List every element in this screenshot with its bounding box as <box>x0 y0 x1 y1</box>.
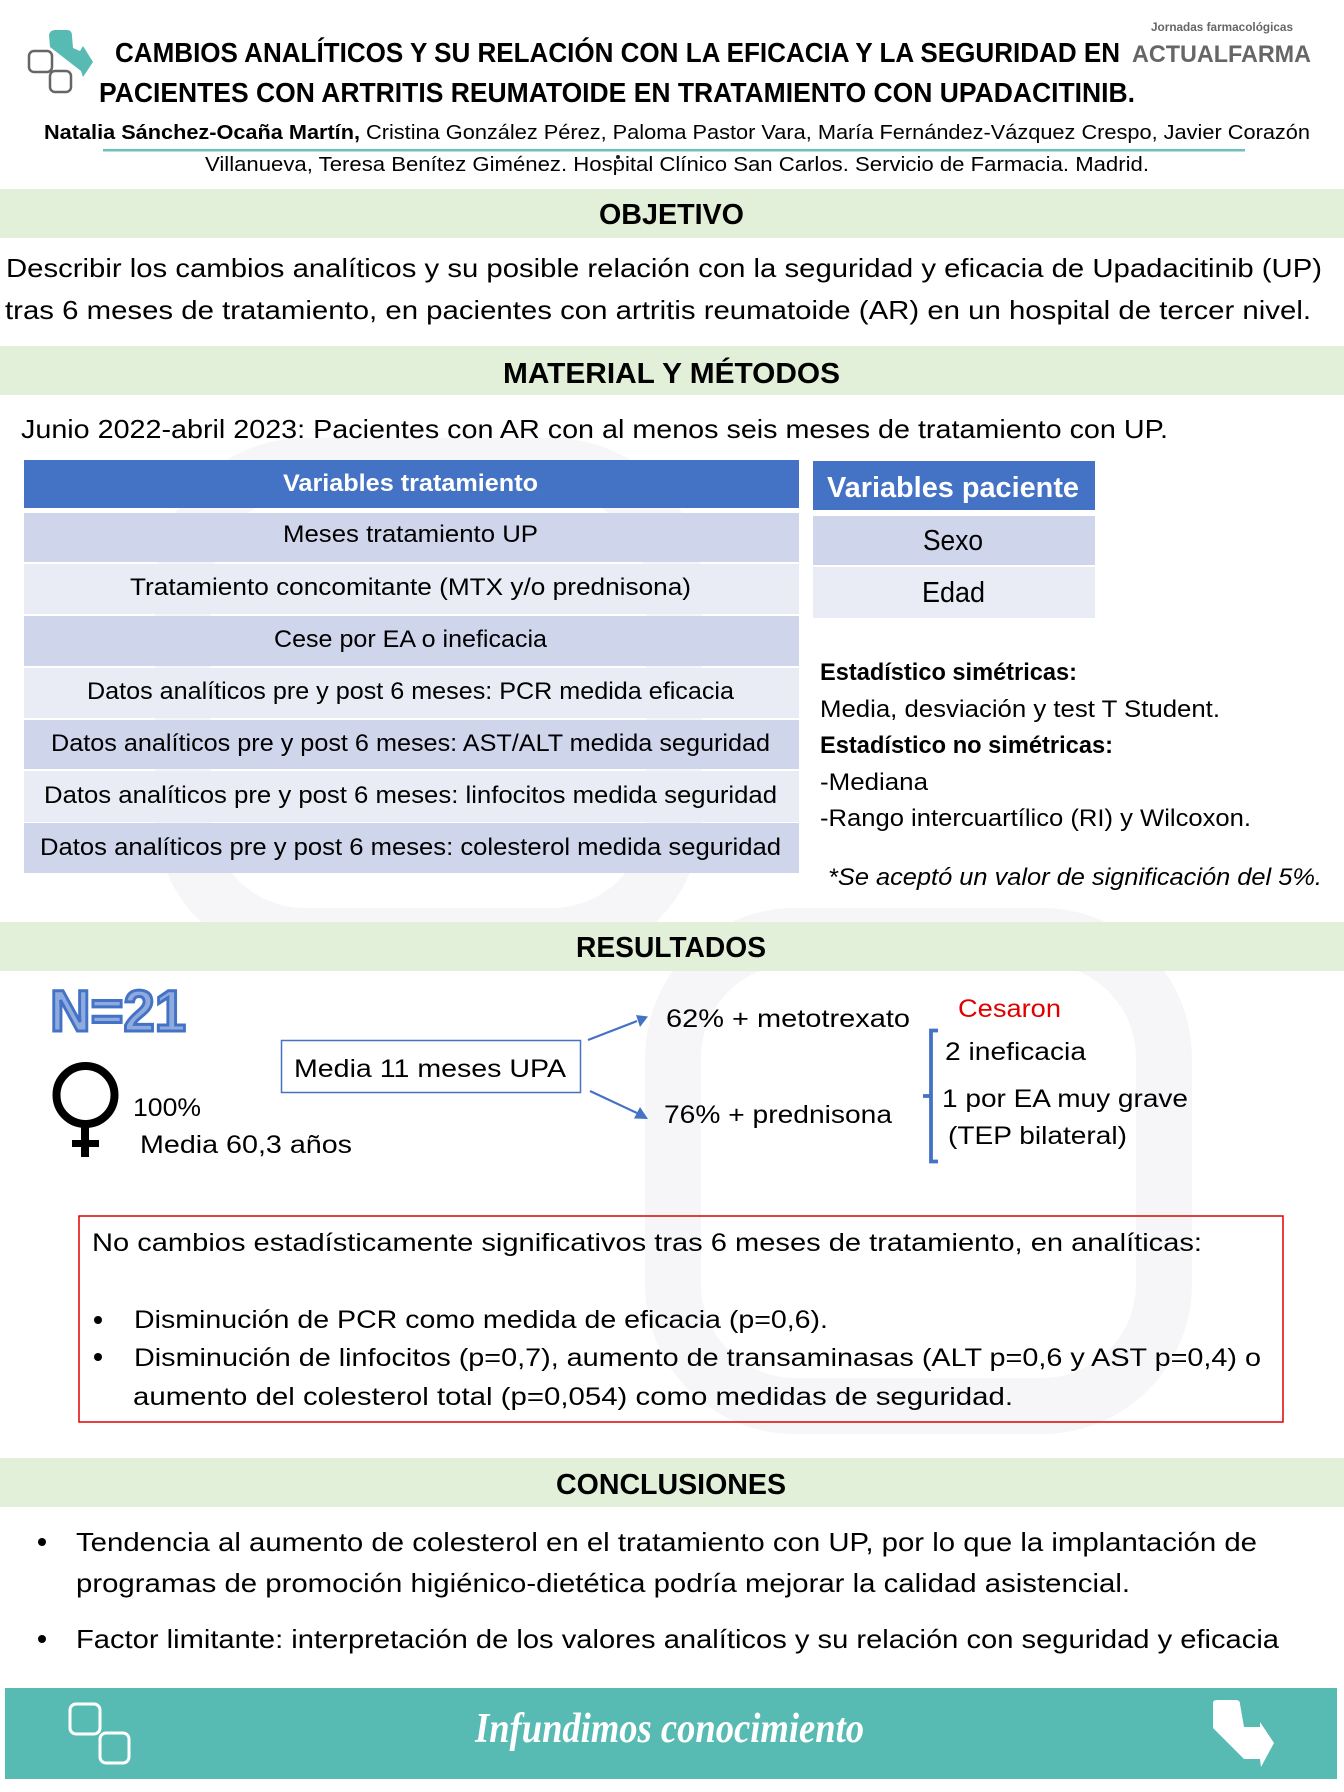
text block: conclusiones: Tendencia al aumento de colesterol en el tratamiento con UP, por lo que la implantación de <box>76 1527 1257 1557</box>
table: variables tratamiento: Datos analíticos pre y post 6 meses: AST/ALT medida seguridad <box>51 730 770 757</box>
icon: footer arrow <box>1213 1700 1274 1767</box>
table: variables paciente: Variables paciente <box>827 472 1079 504</box>
table: variables paciente: Sexo <box>923 525 983 557</box>
text block: objetivo <box>5 253 1322 325</box>
title: PACIENTES CON ARTRITIS REUMATOIDE EN TRATAMIENTO CON UPADACITINIB. <box>99 77 1135 108</box>
authors and affiliation: Villanueva, Teresa Benítez Giménez. Hospital Clínico San Carlos. Servicio de Farmacia. Madrid. <box>205 154 1149 176</box>
table: variables tratamiento: Datos analíticos pre y post 6 meses: linfocitos medida seguridad <box>44 782 777 809</box>
icon: footer squares <box>70 1704 129 1763</box>
icon: female symbol <box>56 1066 114 1157</box>
table: variables tratamiento: Tratamiento concomitante (MTX y/o prednisona) <box>130 574 691 601</box>
box: media 11 meses <box>282 1040 580 1092</box>
title: CAMBIOS ANALÍTICOS Y SU RELACIÓN CON LA EFICACIA Y LA SEGURIDAD EN <box>115 37 1120 68</box>
logo: Jornadas farmacológicas Actualfarma wordmark: ACTUALFARMA <box>1132 41 1311 68</box>
authors and affiliation <box>44 122 1310 176</box>
text block: objetivo: tras 6 meses de tratamiento, en pacientes con artritis reumatoide (AR) en un hospital de tercer nivel. <box>5 295 1311 325</box>
heading: objetivo <box>0 189 1344 238</box>
text block: conclusiones <box>38 1527 1280 1654</box>
text block: patient data: 100% <box>133 1094 201 1122</box>
text block: study period: Junio 2022-abril 2023: Pacientes con AR con al menos seis meses de tratamiento con UP. <box>21 414 1168 444</box>
table: variables tratamiento: Cese por EA o ineficacia <box>274 626 548 653</box>
text: prednisona: 76% + prednisona <box>664 1101 892 1129</box>
table: variables tratamiento: Datos analíticos pre y post 6 meses: colesterol medida seguridad <box>40 834 781 861</box>
text block: cessation reasons <box>942 1038 1188 1150</box>
authors and affiliation: Natalia Sánchez-Ocaña Martín, <box>44 122 360 144</box>
text block: estadístico: Estadístico no simétricas: <box>820 732 1113 759</box>
text block: objetivo: Describir los cambios analíticos y su posible relación con la seguridad y eficacia de Upadacitinib (UP) <box>6 253 1322 283</box>
text block: patient data <box>133 1094 352 1159</box>
text block: estadístico: -Mediana <box>820 769 929 796</box>
footer banner <box>5 1688 1337 1779</box>
footer slogan: Infundimos conocimiento <box>474 1706 864 1752</box>
text block: estadístico: -Rango intercuartílico (RI) y Wilcoxon. <box>820 805 1251 832</box>
logo: Jornadas farmacológicas Actualfarma wordmark <box>1132 20 1311 68</box>
arrow: to prednisona <box>590 1091 648 1119</box>
authors and affiliation: Cristina González Pérez, Paloma Pastor Vara, María Fernández-Vázquez Crespo, Javier Corazón <box>366 122 1310 144</box>
heading: objetivo: OBJETIVO <box>599 199 744 231</box>
text block: conclusiones: programas de promoción higiénico-dietética podría mejorar la calidad asistencial. <box>76 1568 1130 1598</box>
callout: analytical results: No cambios estadísticamente significativos tras 6 meses de tratamiento, en analíticas: <box>92 1229 1202 1257</box>
title <box>99 37 1135 108</box>
table: variables paciente: Edad <box>922 577 985 609</box>
text block: estadístico: Media, desviación y test T Student. <box>820 696 1220 723</box>
text block: cessation reasons: (TEP bilateral) <box>948 1122 1127 1150</box>
note: significance: *Se aceptó un valor de significación del 5%. <box>828 864 1322 891</box>
callout: analytical results: aumento del colesterol total (p=0,054) como medidas de seguridad. <box>133 1383 1013 1411</box>
heading: resultados: RESULTADOS <box>576 932 766 964</box>
text block: cessation reasons: 1 por EA muy grave <box>942 1085 1188 1113</box>
table: variables tratamiento: Datos analíticos pre y post 6 meses: PCR medida eficacia <box>87 678 735 705</box>
heading: resultados <box>0 922 1344 971</box>
table: variables tratamiento: Meses tratamiento UP <box>283 521 538 548</box>
heading: conclusiones: CONCLUSIONES <box>556 1469 786 1501</box>
box: media 11 meses: Media 11 meses UPA <box>294 1055 566 1083</box>
table: variables tratamiento: Variables tratamiento <box>283 470 538 497</box>
arrow: to metotrexato <box>588 1015 648 1040</box>
table: variables tratamiento <box>24 460 799 873</box>
table: variables paciente <box>813 461 1095 618</box>
icon: bracket <box>923 1030 938 1162</box>
text block: patient data: Media 60,3 años <box>140 1131 352 1159</box>
heading: material y métodos: MATERIAL Y MÉTODOS <box>503 356 840 390</box>
callout: analytical results <box>79 1216 1283 1422</box>
callout: analytical results: Disminución de linfocitos (p=0,7), aumento de transaminasas (ALT p=0,6 y AST p=0,4) o <box>134 1344 1261 1372</box>
sample size N=21: N=21 <box>50 979 186 1044</box>
text block: estadístico <box>820 659 1251 832</box>
text block: conclusiones: Factor limitante: interpretación de los valores analíticos y su relación con seguridad y eficacia <box>76 1624 1280 1654</box>
logo: Actualfarma emblem <box>29 30 93 92</box>
text block: estadístico: Estadístico simétricas: <box>820 659 1077 686</box>
callout: analytical results: Disminución de PCR como medida de eficacia (p=0,6). <box>134 1306 828 1334</box>
logo: Jornadas farmacológicas Actualfarma wordmark: Jornadas farmacológicas <box>1151 20 1293 34</box>
label: cesaron: Cesaron <box>958 995 1061 1023</box>
heading: material y métodos <box>0 346 1344 395</box>
text: metotrexato: 62% + metotrexato <box>666 1005 910 1033</box>
text block: cessation reasons: 2 ineficacia <box>945 1038 1086 1066</box>
heading: conclusiones <box>0 1458 1344 1507</box>
watermark: background rounded squares <box>183 466 1164 1406</box>
